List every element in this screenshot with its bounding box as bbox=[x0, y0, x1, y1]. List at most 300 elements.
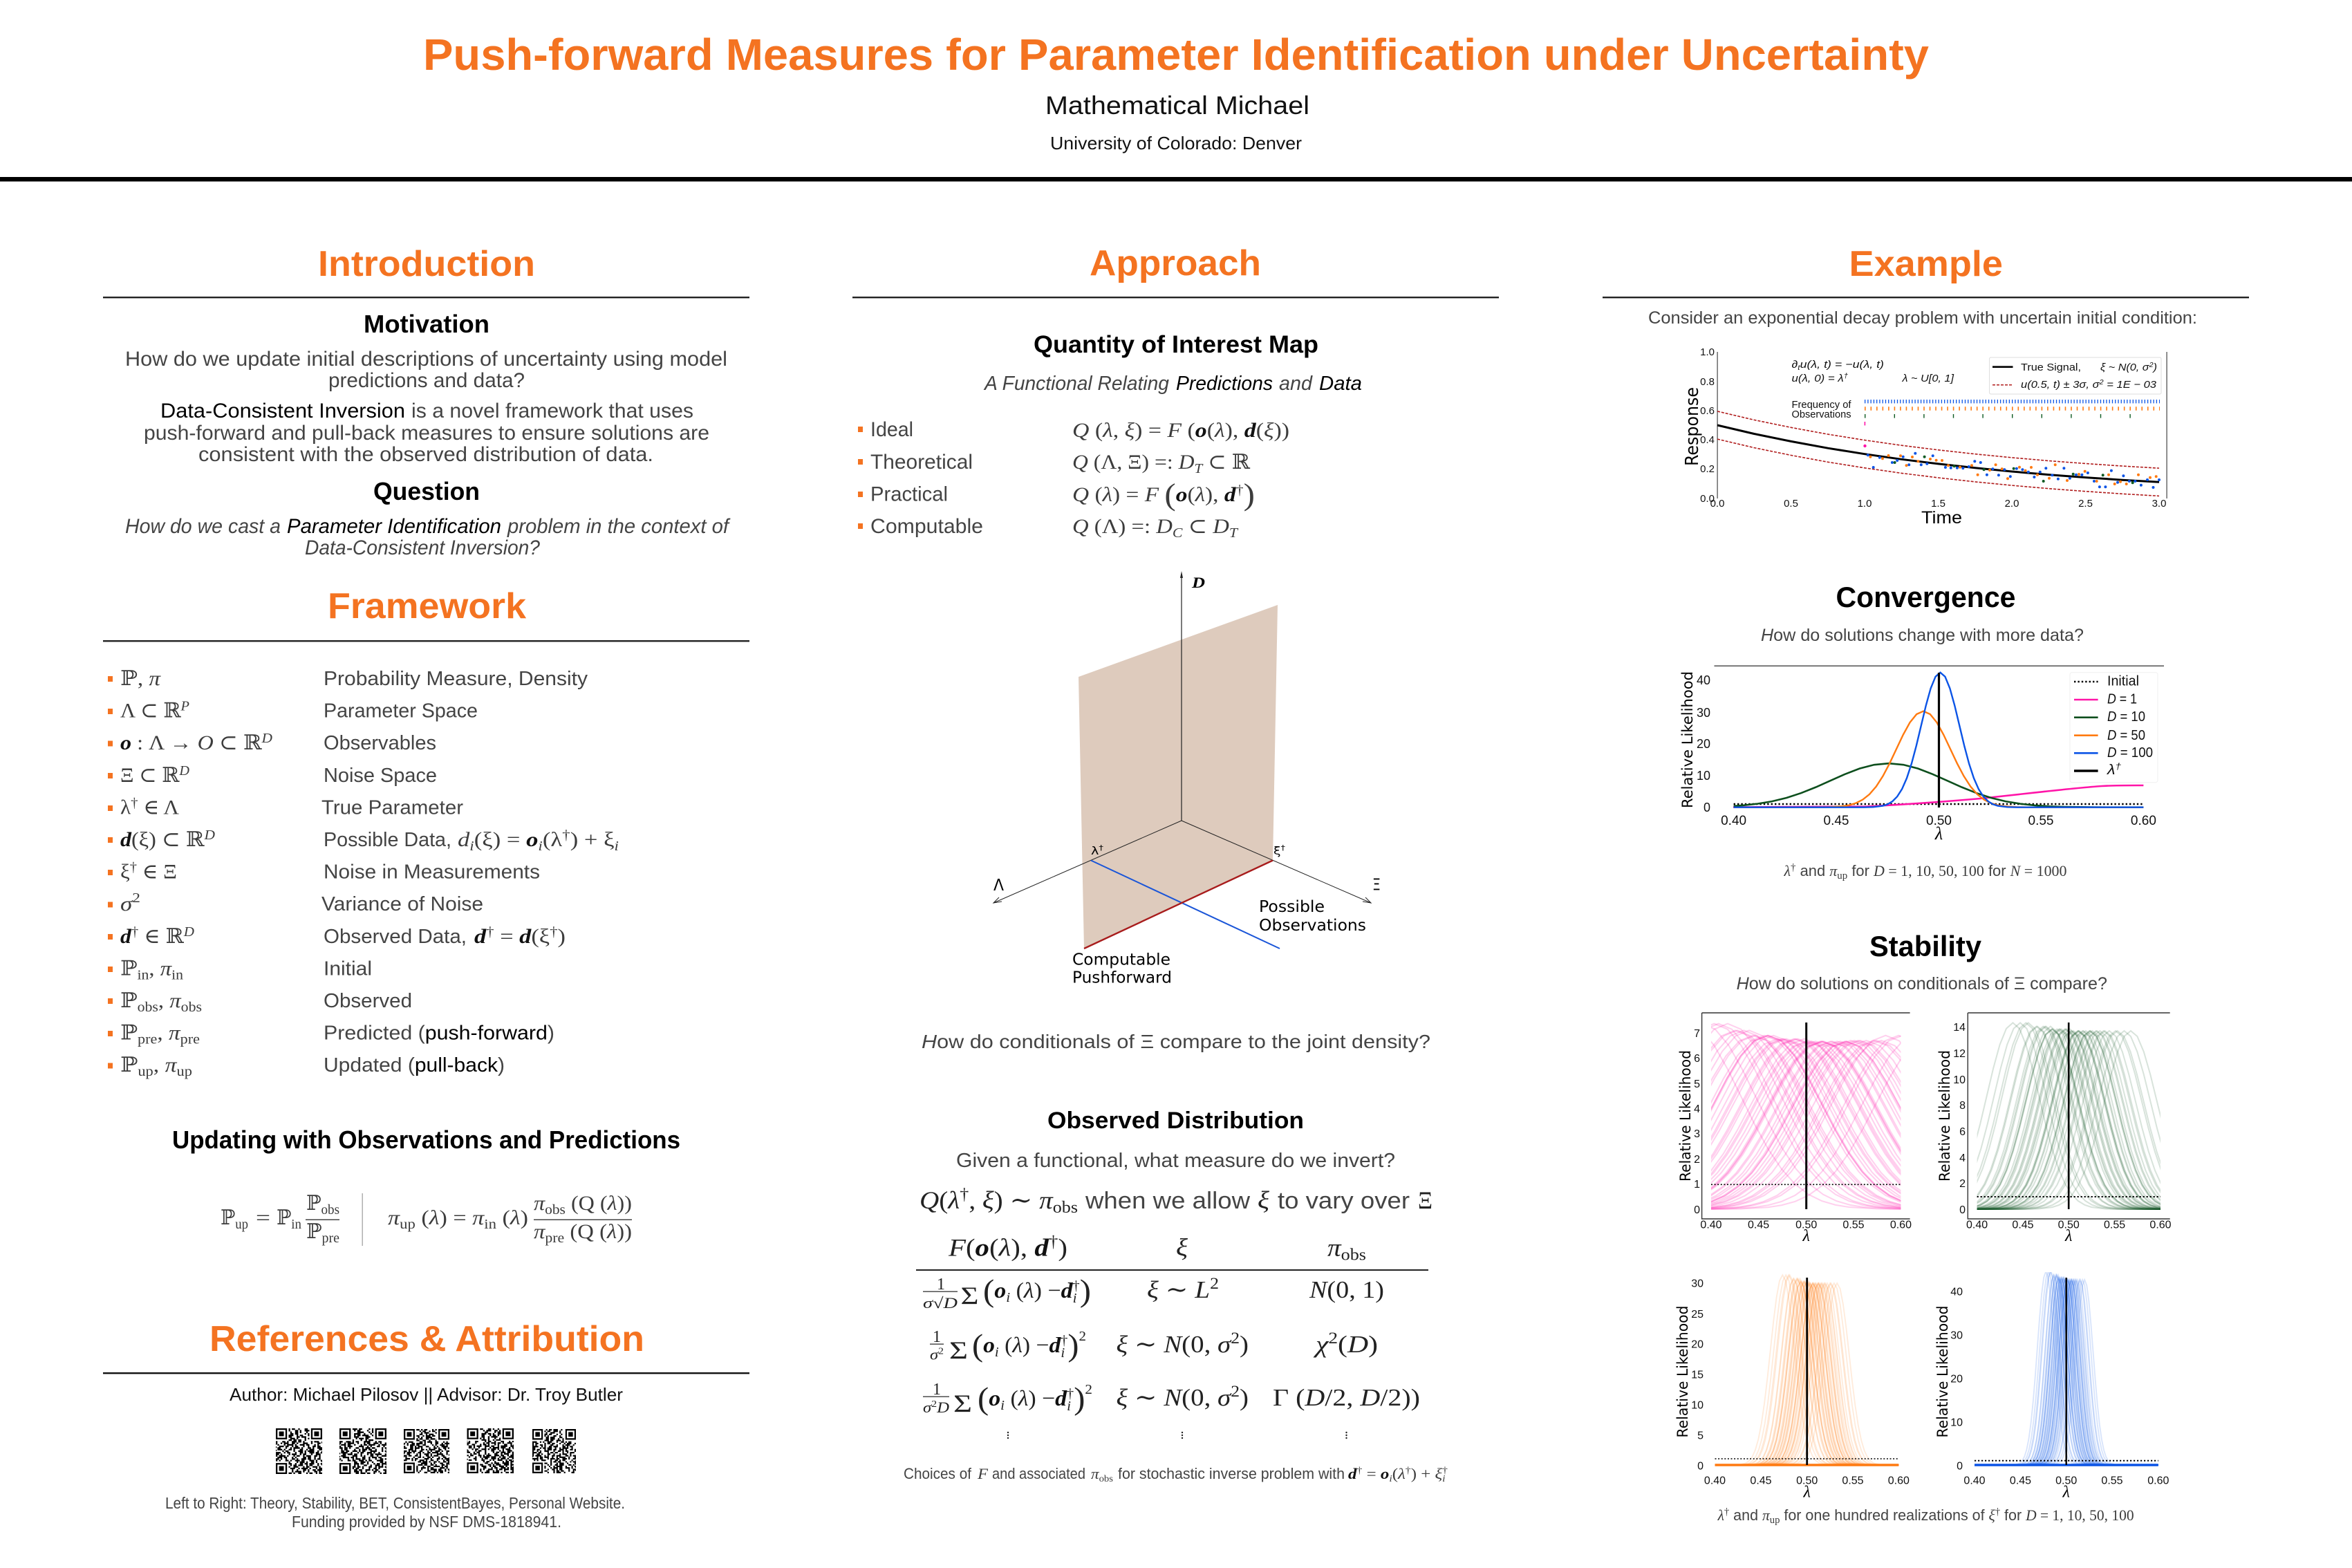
row: observed data: d bbox=[474, 925, 487, 948]
row: initial: in bbox=[138, 967, 149, 982]
table row: ellipsis bbox=[1007, 1432, 1347, 1439]
row: computable: C bbox=[1173, 525, 1183, 541]
curve: lower bound bbox=[1717, 439, 2159, 496]
formula: density update: π bbox=[534, 1192, 545, 1215]
text: measure question: Given a functional, what measure do we invert? bbox=[956, 1150, 1395, 1172]
axis label: Time: Time bbox=[1921, 508, 1962, 528]
caption: choices of F: and associated bbox=[992, 1465, 1085, 1482]
row: initial: ℙ bbox=[120, 957, 136, 980]
y tick labels: 20 bbox=[1691, 1339, 1704, 1351]
curve: D=100 bbox=[1734, 671, 2143, 808]
axis label: lambda: λ bbox=[2062, 1484, 2070, 1502]
caption: choices of F: o bbox=[1381, 1465, 1389, 1482]
y tick labels bbox=[1950, 1287, 1963, 1472]
table row: chi squared: σ bbox=[930, 1345, 939, 1363]
text: statement on Q: obs bbox=[1053, 1199, 1078, 1217]
row: computable: D bbox=[1212, 515, 1229, 538]
table row: L2 noise: i bbox=[1006, 1290, 1010, 1305]
heading: Introduction: Introduction bbox=[318, 244, 535, 284]
caption: convergence: † bbox=[1791, 862, 1796, 873]
row: theoretical: ⊂ ℝ bbox=[1202, 451, 1251, 474]
caption: stability: † bbox=[1724, 1506, 1730, 1518]
chart: convergence densities bbox=[1681, 665, 2164, 839]
formula: density update: λ) = π bbox=[429, 1206, 483, 1229]
y tick labels: 0.6 bbox=[1700, 405, 1715, 417]
table header bbox=[948, 1233, 1366, 1264]
caption: choices of F: ) + bbox=[1411, 1465, 1435, 1482]
y tick labels: 10 bbox=[1953, 1074, 1966, 1086]
text: statement on Q bbox=[920, 1186, 1432, 1217]
row: probability measure: ℙ, π bbox=[120, 667, 161, 690]
row: observed data: d(ξ bbox=[519, 925, 548, 948]
x tick labels: 0.60 bbox=[2147, 1475, 2169, 1487]
y tick labels: 20 bbox=[1950, 1374, 1963, 1385]
text: statement on Q: Q(λ bbox=[920, 1186, 959, 1214]
row: practical: ) bbox=[1244, 478, 1255, 512]
row: initial: π bbox=[160, 957, 172, 980]
text: functional description: Predictions bbox=[1176, 373, 1273, 395]
row: theoretical: T bbox=[1195, 461, 1204, 476]
row: ideal bbox=[858, 418, 1289, 442]
caption: choices of F: = bbox=[1362, 1465, 1381, 1482]
y tick labels: 0 bbox=[1694, 1204, 1700, 1216]
chart: stability D=10 bbox=[0, 1013, 2352, 1245]
observations: D=100 bbox=[1868, 454, 2159, 487]
x tick labels: 0.55 bbox=[1842, 1475, 1864, 1487]
formula: measure update: ℙ bbox=[277, 1206, 292, 1229]
row: possible data: i bbox=[538, 839, 543, 854]
x tick labels bbox=[1710, 498, 2166, 510]
caption: convergence: λ bbox=[1784, 862, 1791, 879]
table row: gamma bbox=[923, 1381, 1420, 1417]
row: observables: Observables bbox=[324, 732, 436, 754]
x tick labels bbox=[1963, 1475, 2169, 1487]
x tick labels: 0.45 bbox=[1748, 1220, 1769, 1231]
row: initial: , bbox=[149, 957, 160, 980]
row: observed data: D bbox=[183, 924, 195, 940]
QR codes bbox=[276, 1428, 576, 1474]
row: possible data: D bbox=[203, 828, 216, 843]
table row: chi squared: 2 bbox=[1328, 1329, 1338, 1347]
heading: Convergence: Convergence bbox=[1836, 581, 2016, 613]
legend: ξ ~ N(0, σ bbox=[2100, 362, 2145, 373]
row: variance of noise: σ bbox=[120, 893, 133, 915]
row: practical: o bbox=[1176, 483, 1187, 506]
row: observed data: † bbox=[550, 924, 558, 940]
caption: choices of F: d bbox=[1348, 1465, 1358, 1482]
y tick labels bbox=[1700, 346, 1715, 505]
legend: 2 bbox=[2098, 379, 2104, 386]
formula: measure update bbox=[221, 1192, 339, 1246]
table row: L2 noise: † bbox=[1072, 1278, 1080, 1294]
row: observables bbox=[108, 731, 436, 754]
text: functional description: A Functional Relating bbox=[983, 373, 1169, 395]
legend: λ bbox=[2107, 763, 2114, 778]
caption: stability: D = 1, 10, 50, 100 bbox=[2026, 1506, 2136, 1524]
row: observed data: † bbox=[131, 924, 138, 940]
marker: lambda dagger bbox=[1938, 673, 1940, 808]
caption: choices of F: ξ bbox=[1435, 1465, 1443, 1482]
row: true parameter: True Parameter bbox=[321, 796, 463, 819]
row: variance of noise bbox=[108, 890, 483, 915]
curves: D=100 realizations bbox=[0, 1271, 2352, 1465]
label: xi dagger: ξ bbox=[1273, 844, 1280, 857]
caption: convergence: for bbox=[1847, 862, 1874, 879]
text: statement on Q: ξ) ∼ π bbox=[982, 1186, 1052, 1214]
row: observed data: † bbox=[486, 924, 494, 940]
formula: density update: pre bbox=[545, 1231, 564, 1246]
label: Xi: Ξ bbox=[1372, 877, 1381, 895]
caption: choices of F: † bbox=[1356, 1466, 1362, 1476]
row: observed data: = bbox=[494, 925, 519, 948]
label: Lambda: Λ bbox=[993, 877, 1004, 895]
text: functional description: and bbox=[1279, 373, 1313, 395]
caption: choices of F: ( bbox=[1392, 1465, 1398, 1482]
row: observed: Observed bbox=[324, 990, 412, 1012]
row: possible data: Possible Data, bbox=[324, 829, 451, 851]
annotation: model equation: t bbox=[1798, 364, 1801, 372]
text: statement on Q: Ξ bbox=[1418, 1186, 1432, 1214]
text: QR caption and funding: Funding provided by NSF DMS-1818941. bbox=[292, 1513, 561, 1531]
y tick labels: 10 bbox=[1950, 1417, 1963, 1429]
legend: 2 bbox=[2149, 362, 2154, 369]
x tick labels: 1.5 bbox=[1931, 498, 1945, 510]
legend: True Signal, bbox=[2021, 362, 2081, 373]
x tick labels: 0.60 bbox=[1890, 1220, 1912, 1231]
icon: QR code stability bbox=[339, 1428, 386, 1474]
table row: chi squared: Σ bbox=[949, 1336, 968, 1364]
row: initial: Initial bbox=[324, 958, 372, 980]
label: computable pushforward: Computable bbox=[1072, 951, 1170, 969]
row: observed: obs bbox=[181, 1000, 202, 1015]
text: question bbox=[125, 515, 731, 559]
text: statement on Q: when we allow bbox=[1085, 1188, 1250, 1214]
chart: exponential decay response bbox=[1682, 346, 2167, 528]
formula: density update: ( bbox=[496, 1206, 510, 1229]
y tick labels: 30 bbox=[1950, 1330, 1963, 1342]
table row: chi squared: ξ ∼ N(0, σ bbox=[1116, 1331, 1229, 1358]
row: noise space: Noise Space bbox=[324, 765, 437, 787]
caption: choices of F: † bbox=[1406, 1466, 1411, 1476]
observations: D=10 bbox=[1895, 457, 2133, 483]
row: updated: Updated (pull-back) bbox=[324, 1054, 505, 1076]
table header: π bbox=[1327, 1233, 1342, 1261]
x tick labels: 0.40 bbox=[1963, 1475, 1986, 1487]
x tick labels: 0.50 bbox=[2055, 1475, 2077, 1487]
row: theoretical bbox=[858, 451, 1251, 476]
y tick labels: 3 bbox=[1694, 1128, 1700, 1140]
row: computable bbox=[858, 515, 1239, 541]
formula: density update: π bbox=[534, 1220, 545, 1243]
panel: example bbox=[1603, 244, 2249, 528]
row: possible data: (ξ) = bbox=[474, 828, 526, 851]
text: QR caption and funding bbox=[165, 1494, 625, 1531]
label: xi dagger: † bbox=[1281, 843, 1286, 852]
axis label: relative likelihood: Relative Likelihood bbox=[1936, 1050, 1953, 1182]
row: true parameter: λ bbox=[120, 796, 131, 819]
caption: convergence: and bbox=[1795, 862, 1829, 879]
x tick labels: 0.60 bbox=[2131, 814, 2156, 828]
heading: Example: Example bbox=[1849, 244, 2003, 284]
y tick labels: 7 bbox=[1694, 1028, 1700, 1040]
caption: stability: up bbox=[1770, 1515, 1780, 1526]
text: motivation question: How do we update initial descriptions of uncertainty using model bbox=[125, 348, 727, 371]
x tick labels: 0.55 bbox=[2101, 1475, 2123, 1487]
x tick labels bbox=[1700, 1220, 1912, 1231]
legend bbox=[2070, 673, 2158, 783]
text: stability question: How do solutions on conditionals of Ξ compare? bbox=[1737, 974, 2107, 993]
formula: measure update: ℙ bbox=[306, 1220, 322, 1243]
table row: chi squared bbox=[930, 1327, 1378, 1364]
x tick labels: 2.0 bbox=[2005, 498, 2019, 510]
y tick labels: 25 bbox=[1691, 1309, 1704, 1320]
caption: choices of F: † bbox=[1442, 1466, 1448, 1476]
table row: gamma: D bbox=[936, 1399, 949, 1416]
x tick labels: 0.50 bbox=[1926, 814, 1952, 828]
row: observed: π bbox=[169, 989, 182, 1012]
caption: stability: and bbox=[1729, 1506, 1762, 1524]
legend: D = 50 bbox=[2107, 728, 2145, 743]
heading: References & Attribution: References & Attribution bbox=[209, 1319, 644, 1359]
row: practical: ( bbox=[1164, 478, 1176, 512]
axis label: Response: Response bbox=[1682, 387, 1703, 466]
formula: density update: λ)) bbox=[608, 1192, 631, 1215]
x tick labels bbox=[1966, 1220, 2172, 1231]
row: computable: Computable bbox=[870, 515, 983, 538]
annotation: frequency of observations: Observations bbox=[1792, 409, 1851, 420]
panel: stability bbox=[0, 930, 2352, 1526]
row: noise in measurements: ξ bbox=[120, 861, 129, 884]
table row: L2 noise: 2 bbox=[1210, 1275, 1219, 1292]
table row: L2 noise: N(0, 1) bbox=[1309, 1276, 1384, 1303]
label: possible observations: Possible bbox=[1259, 898, 1325, 916]
row: updated: up bbox=[177, 1064, 192, 1079]
x tick labels: 0.50 bbox=[2058, 1220, 2080, 1231]
y tick labels: 1 bbox=[1694, 1179, 1700, 1191]
row: computable: Q (Λ) =: D bbox=[1072, 515, 1171, 538]
row: noise in measurements bbox=[108, 860, 540, 884]
axis label: lambda: λ bbox=[2064, 1227, 2072, 1245]
x tick labels: 0.55 bbox=[1842, 1220, 1865, 1231]
x tick labels bbox=[1704, 1475, 1910, 1487]
table row: gamma: ξ ∼ N(0, σ bbox=[1116, 1384, 1229, 1411]
text: author and advisor: Author: Michael Pilosov || Advisor: Dr. Troy Butler bbox=[230, 1384, 623, 1405]
table row: chi squared: 2 bbox=[1231, 1329, 1240, 1347]
legend: D = 10 bbox=[2107, 709, 2145, 725]
y tick labels bbox=[1953, 1022, 1966, 1216]
formula: measure update: pre bbox=[322, 1231, 339, 1246]
x tick labels bbox=[1721, 814, 2156, 828]
row: parameter space bbox=[108, 699, 478, 722]
formula: measure update: obs bbox=[321, 1202, 339, 1217]
text: data-consistent inversion bbox=[144, 400, 709, 466]
y tick labels: 10 bbox=[1697, 769, 1710, 783]
caption: convergence: D = 1, 10, 50, 100 for N = 1000 bbox=[1874, 862, 2067, 879]
row: theoretical: Q (Λ, Ξ) =: D bbox=[1072, 451, 1193, 474]
text: statement on Q: ξ bbox=[1258, 1186, 1270, 1214]
table row: gamma: λ) −d bbox=[1018, 1385, 1066, 1410]
chart: stability D=50 bbox=[0, 1275, 2352, 1502]
x tick labels: 0.45 bbox=[1824, 814, 1849, 828]
legend: Initial bbox=[2107, 674, 2139, 689]
row: practical bbox=[858, 478, 1255, 512]
list: notation bbox=[108, 667, 619, 1079]
y tick labels: 0 bbox=[1957, 1460, 1963, 1472]
row: noise in measurements: † bbox=[130, 860, 137, 875]
row: updated: π bbox=[165, 1054, 178, 1076]
row: possible data bbox=[108, 828, 619, 854]
caption: choices of F: Choices of bbox=[904, 1465, 972, 1482]
row: observed: ℙ bbox=[120, 989, 136, 1012]
row: noise in measurements: Noise in Measurements bbox=[324, 861, 540, 884]
table row: chi squared: o bbox=[983, 1332, 995, 1357]
y tick labels: 12 bbox=[1953, 1048, 1966, 1060]
row: predicted: ℙ bbox=[120, 1022, 136, 1045]
annotation: model equation: ∂ bbox=[1792, 359, 1797, 371]
table row: gamma: 2 bbox=[1085, 1382, 1092, 1397]
list: quantity of interest maps bbox=[858, 418, 1289, 541]
caption: choices of F: F bbox=[977, 1465, 989, 1482]
formula: density update: in bbox=[484, 1217, 496, 1232]
row: variance of noise: 2 bbox=[132, 890, 140, 906]
table row: L2 noise: Σ bbox=[961, 1282, 979, 1309]
panel: framework bbox=[103, 586, 749, 1246]
x tick labels: 0.45 bbox=[2012, 1220, 2034, 1231]
caption: convergence: π bbox=[1829, 862, 1838, 879]
row: predicted bbox=[108, 1022, 554, 1047]
row: updated: up bbox=[138, 1064, 153, 1079]
table row: L2 noise: i bbox=[1073, 1291, 1076, 1306]
y tick labels: 40 bbox=[1697, 673, 1710, 687]
row: updated bbox=[108, 1054, 505, 1079]
table header: ξ bbox=[1176, 1233, 1188, 1261]
table row: gamma: 2 bbox=[1231, 1383, 1240, 1400]
y tick labels bbox=[1697, 673, 1710, 814]
row: practical: † bbox=[1236, 483, 1244, 498]
row: possible data: ) + ξ bbox=[570, 828, 615, 851]
chart: 3D pushforward diagram bbox=[993, 571, 1381, 987]
row: observed data bbox=[108, 924, 566, 948]
row: probability measure bbox=[108, 667, 588, 690]
line: possible observations bbox=[1091, 860, 1280, 949]
heading: Framework: Framework bbox=[328, 586, 526, 626]
row: possible data: i bbox=[615, 839, 619, 854]
caption: stability: † bbox=[1995, 1506, 2001, 1518]
table row: chi squared: 1 bbox=[933, 1328, 941, 1346]
row: observed data: d bbox=[120, 925, 132, 948]
text: data-consistent inversion: consistent with the observed distribution of data. bbox=[198, 443, 653, 466]
curves: D=1 realizations bbox=[0, 1024, 2352, 1209]
x tick labels: 0.60 bbox=[1888, 1475, 1910, 1487]
axis label: relative likelihood: Relative Likelihood bbox=[1677, 1050, 1694, 1182]
table row: L2 noise: 1 bbox=[937, 1276, 945, 1294]
row: updated: ℙ bbox=[120, 1054, 136, 1076]
label: computable pushforward: Pushforward bbox=[1072, 969, 1172, 987]
y tick labels: 6 bbox=[1694, 1053, 1700, 1065]
annotation: model equation: λ ~ U[0, 1] bbox=[1901, 373, 1954, 384]
table row: chi squared: 2 bbox=[1079, 1329, 1086, 1344]
row: true parameter: ∈ Λ bbox=[138, 796, 179, 819]
y tick labels: 14 bbox=[1953, 1022, 1966, 1034]
row: observed data: Observed Data, bbox=[324, 926, 467, 948]
formula: density update: (Q ( bbox=[566, 1192, 608, 1215]
subheading: Quantity of Interest Map: Quantity of Interest Map bbox=[1034, 331, 1318, 358]
row: noise space bbox=[108, 763, 437, 787]
label: D axis: D bbox=[1191, 574, 1205, 591]
y tick labels: 2 bbox=[1959, 1178, 1966, 1190]
row: possible data: d bbox=[458, 828, 470, 851]
table row: chi squared: D) bbox=[1347, 1331, 1376, 1358]
annotation: frequency of observations: Frequency of bbox=[1792, 399, 1851, 411]
curve: true signal bbox=[1717, 425, 2159, 482]
legend: D = 100 bbox=[2107, 745, 2153, 760]
text: example description: Consider an exponential decay problem with uncertain initial condition: bbox=[1648, 308, 2197, 328]
row: observed data: ∈ ℝ bbox=[138, 925, 185, 948]
y tick labels: 20 bbox=[1697, 737, 1710, 751]
caption: choices of F: π bbox=[1091, 1465, 1100, 1482]
curve: upper bound bbox=[1717, 411, 2159, 468]
caption: choices of F: obs bbox=[1099, 1474, 1113, 1484]
x tick labels: 0.50 bbox=[1795, 1220, 1817, 1231]
heading: Stability: Stability bbox=[1869, 930, 1982, 962]
y tick labels: 4 bbox=[1959, 1152, 1966, 1164]
formula: density update: obs bbox=[545, 1202, 566, 1217]
text: motivation question: predictions and data? bbox=[328, 369, 525, 392]
header rule bbox=[0, 177, 2352, 181]
table row: chi squared: ( bbox=[972, 1327, 983, 1363]
label: possible observations bbox=[1259, 898, 1366, 935]
curve: initial bbox=[1734, 803, 2143, 805]
row: practical: Practical bbox=[870, 483, 948, 506]
curve: D=50 bbox=[1734, 710, 2143, 808]
table row: gamma: i bbox=[1000, 1398, 1005, 1413]
subheading: Observed Distribution: Observed Distribution bbox=[1047, 1108, 1304, 1134]
formula: measure update: in bbox=[291, 1217, 301, 1232]
formula: density update: ( bbox=[416, 1206, 429, 1229]
text: conditional question: How do conditionals of Ξ compare to the joint density? bbox=[922, 1031, 1430, 1052]
row: noise space: D bbox=[178, 763, 190, 778]
y tick labels: 0.0 bbox=[1700, 493, 1715, 505]
row: observed: obs bbox=[138, 1000, 158, 1015]
formula: density update: (Q ( bbox=[564, 1220, 607, 1243]
row: predicted: pre bbox=[180, 1032, 200, 1047]
row: noise in measurements: ∈ Ξ bbox=[137, 861, 177, 884]
icon: QR code ConsistentBayes bbox=[467, 1428, 514, 1473]
y tick labels: 0.4 bbox=[1700, 434, 1715, 446]
text: data-consistent inversion: Data-Consistent Inversion bbox=[160, 400, 405, 422]
x tick labels: 0.40 bbox=[1704, 1475, 1726, 1487]
x tick labels: 0.60 bbox=[2149, 1220, 2172, 1231]
subheading: Question: Question bbox=[373, 477, 480, 505]
curves: D=10 realizations bbox=[0, 1023, 2352, 1209]
table row: gamma: σ bbox=[923, 1399, 933, 1416]
y tick labels: 5 bbox=[1694, 1079, 1700, 1090]
header bbox=[0, 30, 2352, 181]
caption: choices of F: i bbox=[1389, 1474, 1392, 1484]
legend: † bbox=[2116, 761, 2122, 772]
row: computable: ⊂ bbox=[1182, 515, 1213, 538]
text: statement on Q: † bbox=[960, 1186, 969, 1204]
annotation: frequency of observations bbox=[1792, 399, 2160, 425]
label: computable pushforward bbox=[1072, 951, 1172, 987]
annotation: model equation bbox=[1792, 359, 1954, 384]
panel: approach bbox=[852, 243, 1499, 1484]
caption: convergence: up bbox=[1837, 870, 1847, 881]
plane: possible data bbox=[1079, 605, 1278, 949]
axis: Lambda bbox=[993, 821, 1182, 903]
x tick labels: 0.55 bbox=[2028, 814, 2053, 828]
formula: measure update: ℙ bbox=[306, 1192, 322, 1215]
